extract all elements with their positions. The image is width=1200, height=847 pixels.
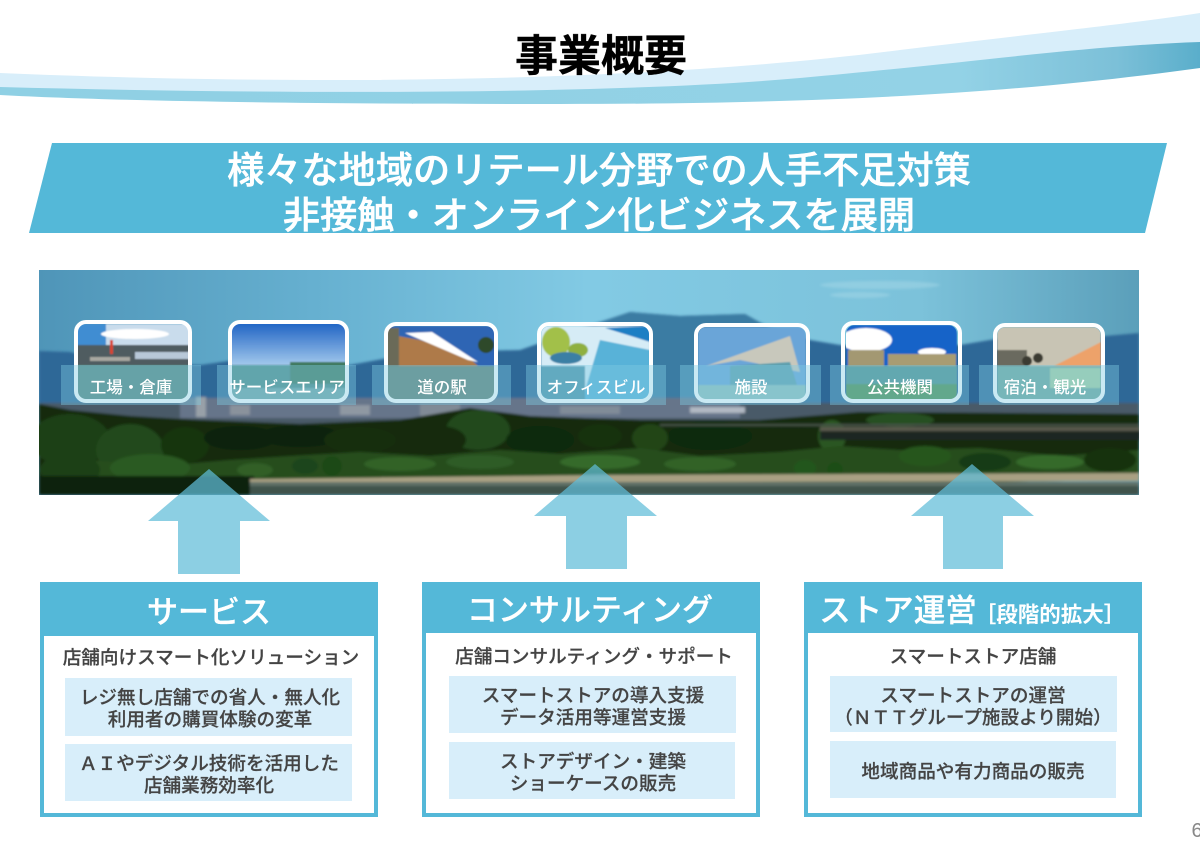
arrow: store operation	[911, 464, 1034, 569]
panel: consulting: コンサルティング	[467, 593, 713, 628]
panel: consulting	[422, 582, 760, 815]
location labels: 道の駅	[417, 378, 467, 397]
banner text	[227, 149, 971, 236]
location labels: 工場・倉庫	[90, 378, 172, 397]
location labels: 公共機関	[867, 378, 933, 397]
panel: service: ＡＩやデジタル技術を活用した	[79, 753, 339, 774]
panel: service: サービス	[147, 595, 271, 630]
location tile: service area	[230, 322, 347, 401]
panel: consulting: ストアデザイン・建築	[500, 751, 686, 772]
panel: store operation: スマートストア店舗	[890, 646, 1056, 667]
elevated road	[660, 424, 1140, 426]
location labels	[90, 378, 1086, 397]
panel: store operation: （ＮＴＴグループ施設より開始）	[834, 707, 1112, 728]
label strips	[61, 365, 1119, 405]
title: 事業概要	[515, 33, 687, 81]
landscape photo	[30, 270, 1140, 495]
location labels: サービスエリア	[229, 378, 345, 397]
near foliage	[95, 445, 1139, 479]
tree mass	[39, 404, 1139, 478]
panel: service: レジ無し店舗での省人・無人化	[80, 687, 341, 708]
panel: service: 利用者の購買体験の変革	[108, 709, 312, 730]
panel: consulting: ショーケースの販売	[510, 773, 676, 794]
panel: store operation: 地域商品や有力商品の販売	[861, 761, 1085, 782]
header wave	[0, 13, 1200, 104]
banner text: 様々な地域のリテール分野での人手不足対策	[227, 149, 971, 191]
location labels: 宿泊・観光	[1004, 378, 1086, 397]
river bank and water	[250, 473, 1139, 483]
panel: service	[40, 582, 378, 815]
panel: consulting: 店舗コンサルティング・サポート	[455, 646, 733, 667]
panel: consulting: スマートストアの導入支援	[482, 685, 705, 706]
panel: service: 店舗業務効率化	[144, 775, 274, 796]
location labels: 施設	[734, 378, 768, 397]
location tile: roadside station	[386, 324, 496, 401]
panel: service: 店舗向けスマート化ソリューション	[63, 647, 359, 668]
location tile: office building	[539, 324, 651, 401]
location labels: オフィスビル	[547, 378, 645, 397]
location tile: lodging	[995, 325, 1103, 401]
panel: store operation: ［段階的拡大］	[975, 603, 1125, 627]
panel: consulting: データ活用等運営支援	[500, 707, 686, 728]
banner text: 非接触・オンライン化ビジネスを展開	[283, 194, 915, 236]
city	[39, 403, 1139, 425]
location tile: facility	[696, 325, 808, 401]
location tile: factory	[76, 322, 190, 401]
panel: store operation: ストア運営	[819, 592, 977, 628]
arrow: consulting	[534, 464, 657, 569]
panel: store operation: スマートストアの運営	[880, 685, 1066, 706]
arrow: service	[148, 469, 270, 574]
location tile: public institution	[840, 323, 960, 401]
banner	[29, 143, 1167, 236]
panel: store operation	[804, 582, 1142, 815]
